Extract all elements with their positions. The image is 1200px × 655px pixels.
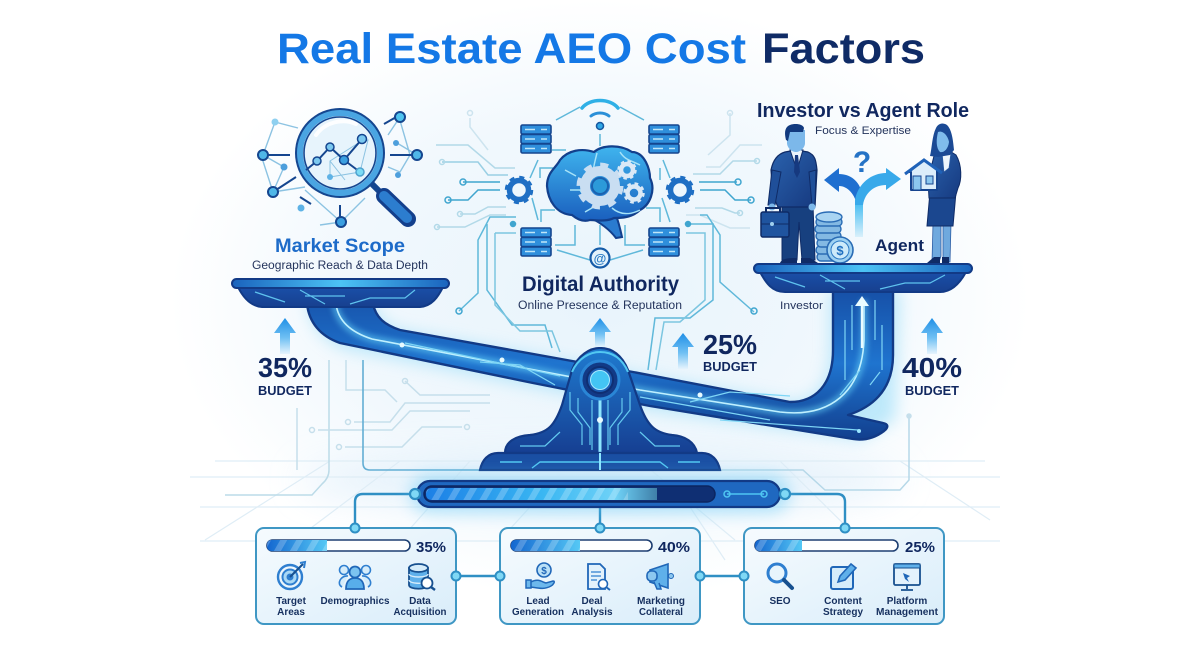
icon: target bbox=[278, 562, 305, 589]
labels: digital authority items: SEO bbox=[769, 596, 791, 607]
heading: investor vs agent role: Focus & Expertise bbox=[815, 125, 911, 137]
stat: 25 percent budget bbox=[703, 329, 757, 374]
labels: investor agent items: Deal bbox=[581, 596, 603, 607]
labels: market scope items: Data bbox=[409, 596, 431, 607]
arrow: market scope up bbox=[274, 318, 296, 354]
progress bar 35 percent bbox=[267, 540, 410, 551]
arrow: 40 percent up bbox=[921, 318, 943, 354]
stat: 35 percent budget bbox=[258, 352, 312, 398]
labels: market scope items: Demographics bbox=[320, 596, 390, 607]
heading: digital authority: Digital Authority bbox=[522, 273, 679, 296]
heading: market scope: Geographic Reach & Data Depth bbox=[252, 260, 428, 272]
heading: market scope bbox=[252, 236, 428, 272]
heading: digital authority: Online Presence & Reputation bbox=[518, 300, 682, 312]
progress bar 40 percent bbox=[511, 540, 652, 551]
arrow: digital authority up bbox=[589, 318, 611, 347]
seesaw lever bbox=[307, 288, 900, 440]
icon: platform management bbox=[894, 564, 920, 590]
panel: digital authority costs bbox=[744, 528, 944, 624]
icon: briefcase bbox=[761, 208, 789, 237]
title: Real Estate AEO Cost bbox=[277, 25, 746, 73]
labels: digital authority items: Content bbox=[824, 596, 863, 607]
stat: 40 percent budget bbox=[902, 352, 962, 398]
heading: investor vs agent role bbox=[757, 100, 969, 137]
master progress bar bbox=[410, 475, 790, 513]
label: agent: Agent bbox=[875, 236, 924, 255]
icon: brain with gears bbox=[547, 146, 652, 238]
labels: market scope items: Acquisition bbox=[394, 607, 446, 618]
labels: digital authority items: Strategy bbox=[823, 607, 863, 618]
labels: investor agent items: Marketing bbox=[637, 596, 685, 607]
connector nodes: master bar bbox=[410, 489, 790, 499]
icon: at sign: @ bbox=[594, 251, 606, 266]
labels: market scope items: Target bbox=[276, 596, 307, 607]
stat: 40 percent budget: 40% bbox=[902, 352, 962, 383]
labels: digital authority items: Management bbox=[876, 607, 939, 618]
circuit traces: digital authority bbox=[436, 107, 762, 370]
icon: decision arrows: ? bbox=[853, 146, 871, 179]
progress bar 25 percent bbox=[755, 540, 898, 551]
labels: digital authority items bbox=[769, 596, 939, 618]
labels: investor agent items: Analysis bbox=[571, 607, 613, 618]
arrow: 25 percent up bbox=[672, 333, 694, 369]
icon: lead generation bbox=[526, 563, 554, 588]
icon: servers bbox=[521, 125, 679, 256]
labels: digital authority items: Platform bbox=[887, 596, 927, 607]
seesaw fulcrum bbox=[480, 348, 720, 470]
icon: coin stack bbox=[815, 212, 853, 263]
icon: content strategy bbox=[831, 564, 856, 589]
heading: digital authority bbox=[518, 273, 682, 312]
labels: investor agent items: Collateral bbox=[639, 607, 683, 618]
right plate bbox=[754, 264, 972, 292]
icon: coin stack: $ bbox=[836, 243, 844, 258]
stat: 25 percent budget: 25% bbox=[703, 329, 757, 360]
left plate bbox=[232, 279, 449, 307]
label: investor: Investor bbox=[780, 300, 823, 312]
icon: agent figure bbox=[927, 124, 961, 264]
icon: magnifier over market network bbox=[258, 108, 422, 227]
labels: investor agent items: Lead bbox=[526, 596, 550, 607]
panel: investor agent costs bbox=[500, 528, 700, 624]
stat: 40 percent budget: BUDGET bbox=[905, 383, 959, 398]
circuit nodes bbox=[434, 110, 760, 314]
value 25 percent: 25% bbox=[905, 539, 935, 556]
icon: lead generation: $ bbox=[541, 566, 547, 577]
title bbox=[277, 25, 925, 73]
icon: data acquisition bbox=[409, 564, 435, 590]
labels: market scope items bbox=[276, 596, 446, 618]
connectors bbox=[355, 494, 845, 576]
icon: side gears bbox=[506, 178, 692, 202]
value 40 percent: 40% bbox=[658, 539, 690, 556]
floor grid bbox=[190, 461, 1000, 560]
icon: seo bbox=[768, 564, 792, 588]
panel: market scope costs bbox=[256, 528, 456, 624]
icon: at sign bbox=[590, 248, 610, 268]
icon: investor figure bbox=[768, 124, 818, 264]
stat: 35 percent budget: BUDGET bbox=[258, 383, 312, 398]
circuit traces: lower background bbox=[225, 360, 911, 495]
icon: wifi bbox=[582, 100, 618, 130]
icon: house bbox=[905, 160, 942, 190]
icon: megaphone bbox=[647, 564, 674, 589]
labels: investor agent items: Generation bbox=[512, 607, 564, 618]
icon: deal analysis bbox=[588, 564, 610, 590]
icon: demographics bbox=[339, 566, 371, 589]
stat: 25 percent budget: BUDGET bbox=[703, 359, 757, 374]
title: Factors bbox=[762, 25, 925, 73]
heading: market scope: Market Scope bbox=[275, 236, 405, 257]
heading: investor vs agent role: Investor vs Agent Role bbox=[757, 100, 969, 122]
labels: investor agent items bbox=[512, 596, 685, 618]
labels: market scope items: Areas bbox=[277, 607, 305, 618]
stat: 35 percent budget: 35% bbox=[258, 352, 312, 383]
connector nodes: panels bbox=[350, 524, 850, 580]
icon: decision arrows bbox=[824, 146, 901, 237]
value 35 percent: 35% bbox=[416, 539, 446, 556]
